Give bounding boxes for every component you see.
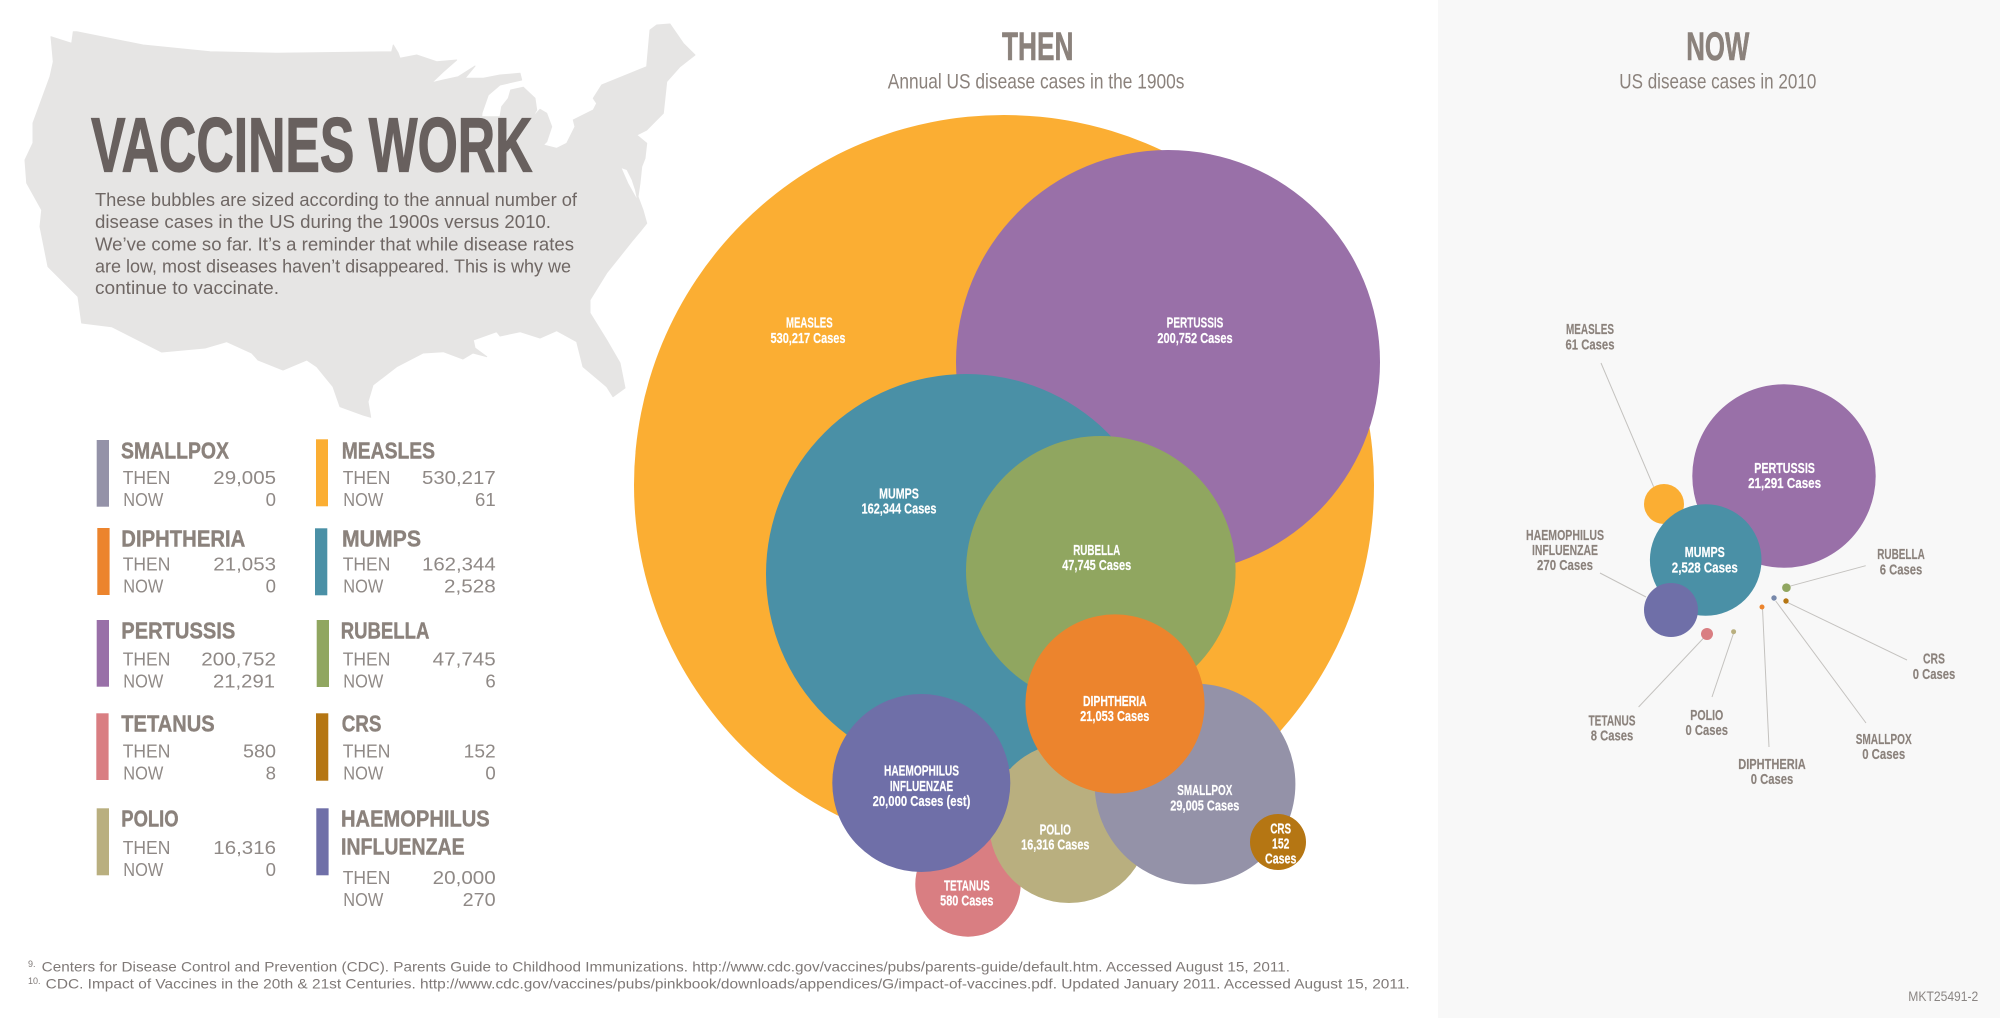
legend: mumps: NOW (343, 576, 384, 597)
label: haemophilus now (1526, 527, 1604, 574)
legend: pertussis (97, 617, 276, 692)
legend: rubella: THEN (343, 649, 390, 670)
map of the United States (25, 24, 695, 417)
label: measles now: MEASLES (1566, 321, 1614, 338)
heading: now: US disease cases in 2010 (1619, 70, 1816, 93)
legend: mumps (315, 526, 496, 597)
label: crs now (1913, 651, 1955, 683)
chart: then bubbles (634, 115, 1380, 937)
legend: mumps: 2,528 (444, 576, 496, 597)
bubble: polio then: POLIO (1040, 821, 1071, 838)
bubble: haemophilus then: HAEMOPHILUS (884, 763, 959, 780)
bubble: crs now (1783, 598, 1789, 604)
legend: crs: CRS (342, 711, 381, 737)
legend: pertussis: NOW (123, 671, 164, 692)
legend: rubella: 6 (485, 671, 496, 692)
legend: rubella: NOW (343, 671, 384, 692)
bubble: haemophilus then (832, 694, 1010, 872)
bubble: haemophilus now (1644, 583, 1698, 637)
bubble: diphtheria then: 21,053 Cases (1080, 708, 1149, 725)
legend: crs (316, 711, 496, 783)
bubble: crs then: Cases (1265, 850, 1296, 867)
label: polio now: POLIO (1690, 707, 1724, 724)
legend: tetanus: 580 (243, 740, 276, 761)
bubble: rubella then: RUBELLA (1073, 542, 1120, 559)
legend: pertussis: 21,291 (213, 671, 275, 692)
legend: diphtheria: NOW (123, 576, 164, 597)
label: tetanus now (1588, 713, 1636, 745)
bubble: polio now (1731, 629, 1736, 634)
footnotes: Centers for Disease Control and Prevention (CDC). Parents Guide to Childhood Immunizations. http://www.cdc.gov/vaccines/pubs/parents-guide/default.htm. Accessed August 15, 2011. (42, 959, 1290, 975)
legend: haemophilus influenzae (316, 806, 496, 910)
label: diphtheria now (1738, 756, 1806, 788)
legend: polio (97, 806, 276, 880)
legend: polio: THEN (123, 837, 170, 858)
intro text block: These bubbles are sized according to the annual number of (95, 189, 578, 210)
legend: pertussis: THEN (123, 649, 170, 670)
legend: smallpox: 0 (266, 489, 276, 510)
legend: crs: 152 (464, 740, 496, 761)
title: VACCINES WORK (91, 103, 532, 189)
label: tetanus now: 8 Cases (1591, 728, 1633, 745)
legend: pertussis: 200,752 (201, 649, 276, 670)
legend: measles: 530,217 (422, 467, 496, 488)
bubble: pertussis then: PERTUSSIS (1167, 315, 1223, 332)
legend: polio: POLIO (121, 806, 179, 832)
bubble: measles then: 530,217 Cases (770, 330, 846, 347)
legend: diphtheria: DIPHTHERIA (121, 526, 245, 552)
heading: then: THEN (1002, 25, 1073, 69)
legend: pertussis: PERTUSSIS (121, 617, 235, 643)
label: smallpox now: 0 Cases (1862, 746, 1905, 763)
legend: diphtheria: 21,053 (213, 554, 276, 575)
bubble: mumps now: MUMPS (1685, 544, 1725, 561)
label: diphtheria now: DIPHTHERIA (1738, 756, 1806, 773)
bubble: polio then: 16,316 Cases (1021, 837, 1089, 854)
bubble: rubella then: 47,745 Cases (1062, 557, 1131, 574)
intro text block: continue to vaccinate. (95, 277, 279, 298)
label: haemophilus now: 270 Cases (1537, 557, 1593, 574)
bubble: crs then: 152 (1272, 835, 1289, 852)
intro text block: disease cases in the US during the 1900s versus 2010. (95, 211, 551, 232)
bubble: polio then (989, 743, 1149, 903)
bubble: diphtheria then (1025, 614, 1205, 794)
bubble: mumps then (766, 374, 1166, 774)
bubble: crs then (1250, 814, 1306, 870)
legend: smallpox: NOW (123, 489, 164, 510)
bubble: diphtheria now (1760, 604, 1764, 610)
legend: measles: MEASLES (342, 437, 435, 463)
legend: polio: 16,316 (213, 837, 276, 858)
bubble: mumps now (1650, 504, 1761, 616)
legend: smallpox: THEN (123, 467, 170, 488)
chart: now bubbles (1526, 321, 1955, 788)
legend: haemophilus influenzae: 270 (463, 889, 496, 910)
bubble: haemophilus then: 20,000 Cases (est) (873, 793, 970, 810)
intro text block: are low, most diseases haven’t disappeared. This is why we (95, 255, 571, 276)
legend: measles: NOW (343, 489, 384, 510)
label: rubella now (1877, 546, 1925, 579)
legend: tetanus: THEN (123, 740, 170, 761)
bubble: pertussis now: 21,291 Cases (1748, 475, 1821, 492)
legend: haemophilus influenzae: NOW (343, 889, 384, 910)
legend: mumps: THEN (343, 554, 390, 575)
legend: rubella: RUBELLA (341, 617, 429, 643)
legend: crs: NOW (343, 762, 384, 783)
bubble: diphtheria then: DIPHTHERIA (1083, 693, 1147, 710)
bubble: mumps now: 2,528 Cases (1672, 560, 1738, 577)
label: crs now: 0 Cases (1913, 666, 1955, 683)
bubble: measles now (1644, 484, 1684, 524)
bubble: tetanus then: 580 Cases (940, 893, 993, 910)
bubble: mumps then: 162,344 Cases (862, 501, 936, 518)
legend: measles: 61 (475, 489, 496, 510)
bubble: smallpox then: 29,005 Cases (1170, 797, 1239, 814)
bubble: haemophilus then: INFLUENZAE (890, 778, 953, 795)
legend: smallpox: SMALLPOX (121, 437, 230, 463)
legend: tetanus: 8 (266, 762, 276, 783)
legend: diphtheria: THEN (123, 554, 170, 575)
bubble: tetanus then: TETANUS (944, 878, 990, 895)
label: haemophilus now: INFLUENZAE (1532, 542, 1598, 559)
label: measles now: 61 Cases (1566, 336, 1614, 354)
bubble: mumps then: MUMPS (879, 485, 919, 502)
legend: haemophilus influenzae: THEN (343, 867, 390, 888)
footnotes: 9. (28, 959, 36, 969)
heading: now: NOW (1686, 25, 1749, 69)
legend: haemophilus influenzae: INFLUENZAE (341, 833, 465, 859)
bubble: smallpox then (1095, 684, 1295, 884)
bubble: rubella then (966, 436, 1236, 706)
legend: mumps: 162,344 (422, 554, 496, 575)
leader lines (1600, 363, 1907, 747)
bubble: pertussis then: 200,752 Cases (1157, 330, 1233, 347)
legend: smallpox (97, 437, 276, 510)
legend: rubella (317, 617, 496, 692)
legend: tetanus (96, 711, 276, 783)
legend: measles (316, 437, 496, 510)
document code: MKT25491-2 (1908, 989, 1978, 1004)
panel: now background (1438, 0, 2000, 1018)
legend: tetanus: NOW (123, 762, 164, 783)
label: tetanus now: TETANUS (1588, 713, 1636, 730)
bubble: measles then (634, 115, 1374, 855)
label: rubella now: 6 Cases (1880, 562, 1922, 579)
bubble: tetanus then (915, 831, 1021, 937)
intro text block (95, 189, 578, 298)
legend: diphtheria: 0 (266, 576, 276, 597)
legend: haemophilus influenzae: 20,000 (433, 867, 496, 888)
bubble: pertussis now (1692, 384, 1876, 568)
bubble: pertussis then (956, 150, 1380, 574)
footnotes (28, 959, 1410, 991)
legend: rubella: 47,745 (433, 649, 496, 670)
bubble: pertussis now: PERTUSSIS (1754, 460, 1815, 477)
heading: then: Annual US disease cases in the 1900s (888, 70, 1184, 93)
legend: polio: NOW (123, 859, 164, 880)
heading: then (888, 25, 1184, 93)
bubble: crs then: CRS (1270, 820, 1291, 837)
legend: crs: 0 (485, 762, 496, 783)
bubble: smallpox now (1771, 595, 1777, 601)
label: rubella now: RUBELLA (1877, 546, 1925, 563)
bubble: measles then: MEASLES (786, 315, 833, 332)
bubble: tetanus now (1701, 628, 1713, 640)
heading: now (1619, 25, 1816, 93)
legend: measles: THEN (343, 467, 390, 488)
label: measles now (1566, 321, 1614, 354)
legend: tetanus: TETANUS (121, 711, 215, 737)
legend: crs: THEN (343, 740, 390, 761)
label: polio now (1686, 707, 1728, 739)
legend: polio: 0 (266, 859, 276, 880)
bubble: smallpox then: SMALLPOX (1177, 782, 1232, 799)
label: smallpox now: SMALLPOX (1856, 731, 1912, 748)
legend: diphtheria (97, 526, 276, 597)
label: smallpox now (1856, 731, 1912, 763)
intro text block: We’ve come so far. It’s a reminder that while disease rates (95, 233, 574, 254)
legend: haemophilus influenzae: HAEMOPHILUS (341, 806, 490, 832)
label: diphtheria now: 0 Cases (1751, 771, 1793, 788)
label: haemophilus now: HAEMOPHILUS (1526, 527, 1604, 544)
legend: smallpox: 29,005 (213, 467, 276, 488)
legend: mumps: MUMPS (342, 526, 421, 552)
label: crs now: CRS (1923, 651, 1945, 668)
footnotes: 10. (28, 976, 41, 986)
label: polio now: 0 Cases (1686, 722, 1728, 739)
footnotes: CDC. Impact of Vaccines in the 20th & 21st Centuries. http://www.cdc.gov/vaccines/pubs/pinkbook/downloads/appendices/G/impact-of-vaccines.pdf. Updated January 2011. Accessed August 15, 2011. (46, 975, 1410, 991)
bubble: rubella now (1782, 583, 1791, 592)
